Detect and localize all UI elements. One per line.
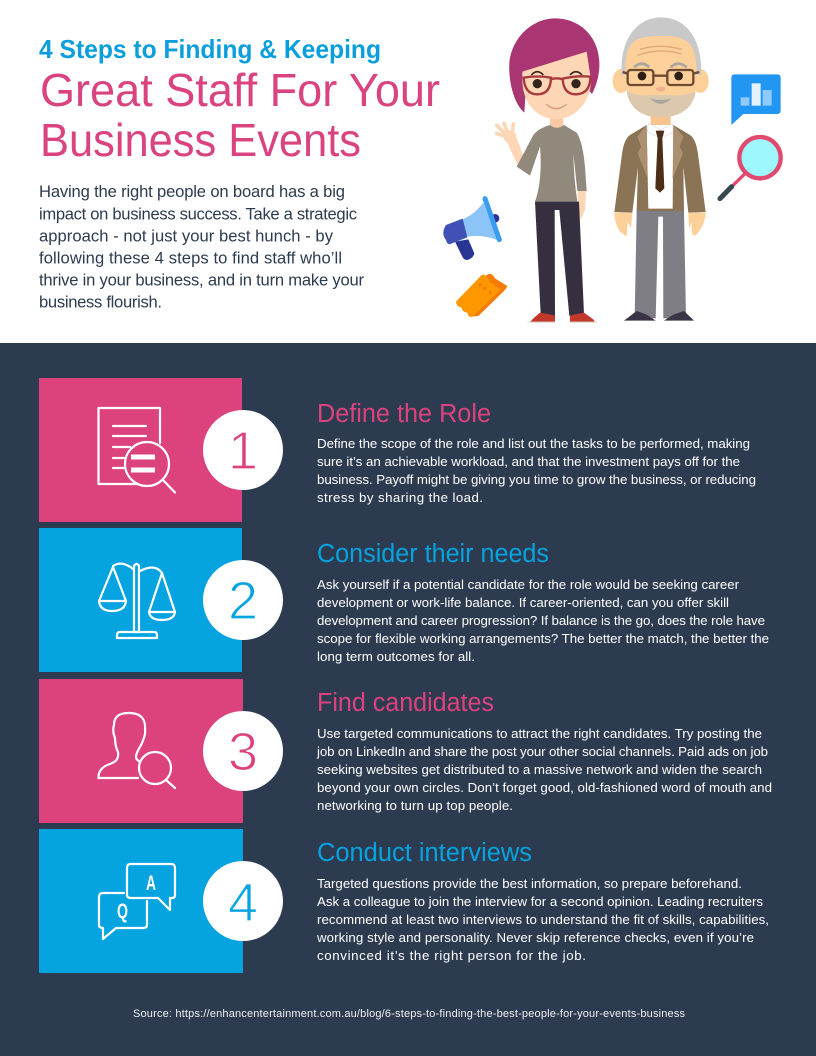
source line: Source: https://enhancentertainment.com.au/blog/6-steps-to-finding-the-best-people-for-your-events-business bbox=[133, 1008, 686, 1020]
number badge 4: 4 bbox=[228, 873, 258, 933]
heading: conduct interviews: Conduct interviews bbox=[317, 839, 532, 867]
icon: chart speech bubble bbox=[731, 74, 781, 125]
icon: scales bbox=[99, 564, 175, 638]
intro text: impact on business success. Take a strategic bbox=[39, 204, 357, 224]
text: define the role: stress by sharing the load. bbox=[317, 490, 483, 505]
panel: step 2 bbox=[39, 528, 769, 672]
heading: find candidates: Find candidates bbox=[317, 689, 494, 717]
heading: define the role: Define the Role bbox=[317, 400, 491, 428]
text: conduct interviews: Ask a colleague to join the interview for a second opinion. Leading recruiters bbox=[317, 894, 763, 909]
text: conduct interviews: working style and personality. Never skip reference checks, even if you’re bbox=[316, 930, 754, 945]
title bbox=[40, 64, 440, 166]
icon: ticket bbox=[456, 274, 507, 317]
number badge 1 bbox=[203, 410, 283, 490]
panel: step 4 bbox=[39, 829, 769, 973]
icon: magnifying glass bbox=[720, 137, 781, 199]
step 1 card bbox=[39, 378, 242, 522]
icon: person search bbox=[98, 713, 175, 788]
icon: question and answer bubbles bbox=[99, 864, 175, 939]
intro text: following these 4 steps to find staff who’ll bbox=[39, 248, 342, 268]
text: find candidates: seeking websites get distributed to a massive network and widen the search bbox=[317, 762, 762, 777]
text: conduct interviews bbox=[316, 876, 769, 963]
text: consider their needs bbox=[317, 577, 769, 664]
number badge 2 bbox=[203, 560, 283, 640]
text: consider their needs: development and career progression? If balance is the go, does the role have bbox=[317, 613, 765, 628]
subtitle: 4 Steps to Finding & Keeping bbox=[39, 34, 381, 64]
number badge 3: 3 bbox=[228, 722, 258, 782]
icon: question and answer bubbles: A bbox=[146, 872, 156, 895]
title: Business Events bbox=[40, 114, 361, 166]
step 3 card bbox=[39, 679, 243, 823]
text: find candidates: job on LinkedIn and share the post your other social channels. Paid ads on job bbox=[316, 744, 768, 759]
icon: megaphone bbox=[443, 199, 499, 260]
intro text: Having the right people on board has a big bbox=[39, 182, 345, 201]
man character bbox=[613, 17, 709, 321]
panel: step 3 bbox=[39, 679, 772, 823]
icon: question and answer bubbles: Q bbox=[117, 900, 128, 923]
text: consider their needs: development or work-life balance. If career-oriented, can you offer skill bbox=[317, 595, 729, 610]
text: define the role bbox=[317, 436, 756, 505]
woman character bbox=[497, 18, 599, 322]
step 4 card bbox=[39, 829, 243, 973]
text: find candidates: beyond your own circles. Don’t forget good, old-fashioned word of mouth and bbox=[317, 780, 772, 795]
step 2 card bbox=[39, 528, 242, 672]
intro text bbox=[39, 182, 364, 312]
text: conduct interviews: convinced it’s the right person for the job. bbox=[317, 948, 586, 963]
number badge 3 bbox=[203, 711, 283, 791]
text: find candidates bbox=[316, 726, 772, 813]
number badge 1: 1 bbox=[228, 421, 258, 481]
text: conduct interviews: Targeted questions provide the best information, so prepare beforehand. bbox=[317, 876, 742, 891]
number badge 4 bbox=[203, 861, 283, 941]
text: consider their needs: scope for flexible working arrangements? The better the match, the better the bbox=[317, 631, 769, 646]
number badge 2: 2 bbox=[228, 571, 258, 631]
icon: document search bbox=[98, 408, 175, 492]
panel: step 1 bbox=[39, 378, 756, 522]
text: consider their needs: long term outcomes for all. bbox=[317, 649, 475, 664]
text: define the role: Define the scope of the role and list out the tasks to be performed, making bbox=[317, 436, 750, 451]
illustration: people and event icons bbox=[443, 17, 781, 322]
dark background panel bbox=[0, 343, 816, 1056]
text: conduct interviews: recommend at least two interviews to understand the fit of skills, capabilities, bbox=[317, 912, 769, 927]
intro text: business flourish. bbox=[39, 292, 162, 312]
text: define the role: sure it’s an achievable workload, and that the investment pays off for the bbox=[317, 454, 740, 469]
text: find candidates: Use targeted communications to attract the right candidates. Try posting the bbox=[317, 726, 762, 741]
heading: consider their needs: Consider their needs bbox=[317, 540, 549, 568]
title: Great Staff For Your bbox=[40, 64, 440, 116]
text: define the role: business. Payoff might be giving you time to grow the business, or reducing bbox=[317, 472, 756, 487]
text: consider their needs: Ask yourself if a potential candidate for the role would be seeking career bbox=[317, 577, 740, 592]
intro text: thrive in your business, and in turn make your bbox=[39, 270, 364, 290]
intro text: approach - not just your best hunch - by bbox=[39, 226, 334, 246]
text: find candidates: networking to turn up top people. bbox=[317, 798, 513, 813]
